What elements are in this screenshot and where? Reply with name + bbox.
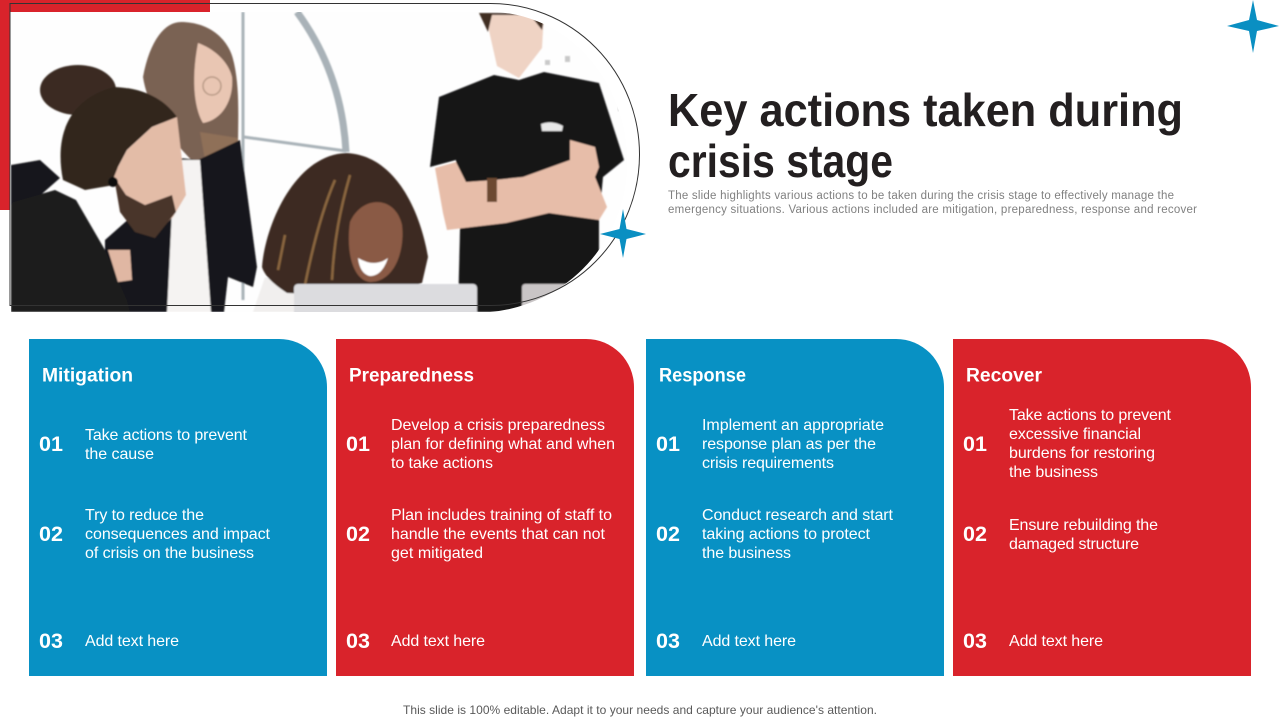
- photo: team looking at a laptop: [11, 12, 635, 316]
- item 01: burdens for restoring: [1009, 445, 1155, 462]
- item 03: [39, 629, 179, 653]
- background specks: [545, 56, 635, 196]
- subtitle: emergency situations. Various actions included are mitigation, preparedness, response and recover: [668, 204, 1197, 216]
- item 01: [39, 427, 248, 463]
- item 03: Add text here: [1009, 633, 1103, 650]
- title: [668, 84, 1183, 187]
- item 02: [39, 507, 271, 562]
- item 01: Implement an appropriate: [702, 417, 884, 434]
- subtitle: [668, 190, 1197, 216]
- item 01: Develop a crisis preparedness: [391, 417, 605, 434]
- item 02: damaged structure: [1009, 536, 1139, 553]
- item 02: handle the events that can not: [391, 526, 606, 543]
- panel: Response: [646, 339, 944, 676]
- panel: Response: Response: [659, 366, 746, 386]
- man with hair bun: [11, 65, 186, 312]
- footer note: This slide is 100% editable. Adapt it to your needs and capture your audience's attention.: [403, 703, 877, 717]
- item 03: Add text here: [702, 633, 796, 650]
- item 01: 01: [963, 432, 987, 456]
- item 01: Take actions to prevent: [1009, 407, 1172, 424]
- item 03: Add text here: [85, 633, 179, 650]
- item 02: the business: [702, 545, 791, 562]
- item 01: 01: [39, 432, 63, 456]
- laptops: [292, 282, 567, 312]
- subtitle: The slide highlights various actions to be taken during the crisis stage to effectively manage the: [668, 190, 1174, 202]
- item 01: 01: [346, 432, 370, 456]
- item 02: 02: [39, 522, 63, 546]
- icon: star top right: [1227, 0, 1279, 53]
- item 03: [963, 629, 1103, 653]
- item 03: [346, 629, 485, 653]
- panel: Preparedness: [336, 339, 634, 676]
- item 02: Try to reduce the: [85, 507, 204, 524]
- item 01: response plan as per the: [702, 436, 876, 453]
- item 01: [656, 417, 884, 472]
- photo outline: [10, 3, 640, 306]
- woman with glasses: [105, 22, 257, 312]
- item 01: Take actions to prevent: [85, 427, 248, 444]
- item 02: 02: [963, 522, 987, 546]
- item 02: get mitigated: [391, 545, 483, 562]
- item 03: 03: [656, 629, 680, 653]
- item 02: [346, 507, 612, 562]
- item 03: [656, 629, 796, 653]
- panel: Preparedness: Preparedness: [349, 366, 474, 386]
- window frame: [243, 12, 346, 300]
- man in black t-shirt: [430, 13, 624, 312]
- item 03: 03: [346, 629, 370, 653]
- item 03: Add text here: [391, 633, 485, 650]
- item 02: consequences and impact: [85, 526, 271, 543]
- item 01: to take actions: [391, 455, 493, 472]
- item 02: 02: [656, 522, 680, 546]
- item 01: the business: [1009, 464, 1098, 481]
- item 01: the cause: [85, 446, 154, 463]
- title: Key actions taken during: [668, 84, 1183, 136]
- panel: Recover: Recover: [966, 366, 1043, 386]
- item 02: [963, 517, 1158, 553]
- item 01: plan for defining what and when: [391, 436, 615, 453]
- panel: Recover: [953, 339, 1251, 676]
- item 01: crisis requirements: [702, 455, 834, 472]
- item 02: Plan includes training of staff to: [391, 507, 612, 524]
- item 01: [346, 417, 615, 472]
- item 03: 03: [39, 629, 63, 653]
- item 02: [656, 507, 894, 562]
- woman with curly hair: [253, 153, 428, 312]
- item 02: Ensure rebuilding the: [1009, 517, 1158, 534]
- item 02: of crisis on the business: [85, 545, 254, 562]
- item 02: Conduct research and start: [702, 507, 894, 524]
- panel: Mitigation: [29, 339, 327, 676]
- panel: Mitigation: Mitigation: [42, 366, 133, 386]
- item 03: 03: [963, 629, 987, 653]
- item 02: taking actions to protect: [702, 526, 871, 543]
- item 01: excessive financial: [1009, 426, 1141, 443]
- red corner accent: [0, 0, 210, 210]
- title: crisis stage: [668, 135, 893, 187]
- item 01: [963, 407, 1172, 481]
- icon: star on photo: [600, 209, 646, 258]
- item 02: 02: [346, 522, 370, 546]
- item 01: 01: [656, 432, 680, 456]
